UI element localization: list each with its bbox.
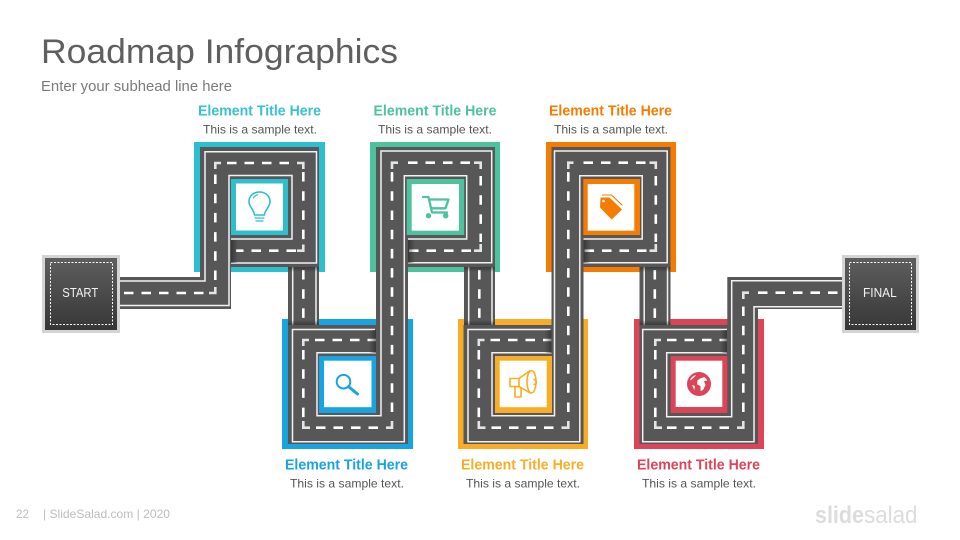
label: orange element: This is a sample text.	[554, 122, 668, 136]
subhead: Enter your subhead line here	[41, 79, 232, 95]
road: yellow loop and orange loop	[464, 147, 670, 444]
footer page number and credit: | SlideSalad.com | 2020	[43, 507, 170, 521]
label: teal element: Element Title Here	[198, 104, 321, 120]
label: orange element: Element Title Here	[549, 104, 672, 120]
label: red element: Element Title Here	[637, 458, 760, 474]
footer page number and credit: 22	[16, 507, 29, 521]
label: teal element	[198, 104, 321, 136]
icon: price tag	[583, 179, 640, 235]
label: teal element: This is a sample text.	[203, 122, 317, 136]
road: connector from green loop to yellow loop	[464, 267, 495, 325]
label: green element: This is a sample text.	[378, 122, 492, 136]
road: connector from first loop to blue loop	[288, 267, 319, 325]
road: start to first loop	[120, 147, 319, 309]
label: yellow element: Element Title Here	[461, 458, 584, 474]
icon: light bulb	[231, 179, 288, 235]
start box	[42, 255, 120, 333]
label: green element	[374, 104, 496, 136]
label: green element: Element Title Here	[374, 104, 496, 120]
label: orange element	[549, 104, 672, 136]
label: red element: This is a sample text.	[642, 476, 756, 490]
icon: globe	[671, 356, 727, 413]
logo	[815, 502, 918, 529]
icon: magnifying glass	[319, 356, 376, 413]
label: blue element: Element Title Here	[285, 458, 408, 474]
label: yellow element: This is a sample text.	[466, 476, 580, 490]
icon: megaphone	[495, 356, 552, 413]
label: yellow element	[461, 458, 584, 490]
panel backgrounds: coloured squares	[194, 142, 764, 449]
road: red loop to final	[640, 277, 843, 444]
label: red element	[637, 458, 760, 490]
final box	[842, 255, 919, 333]
logo: salad	[864, 502, 918, 529]
label: blue element: This is a sample text.	[290, 476, 404, 490]
title: Roadmap Infographics	[41, 33, 398, 71]
label: blue element	[285, 458, 408, 490]
final box: FINAL	[863, 286, 897, 300]
road: blue loop and green loop	[288, 147, 495, 444]
logo: slide	[815, 502, 864, 529]
icon: shopping cart	[407, 179, 464, 235]
start box: START	[62, 286, 99, 300]
road: connector from orange loop to red loop	[640, 267, 670, 325]
